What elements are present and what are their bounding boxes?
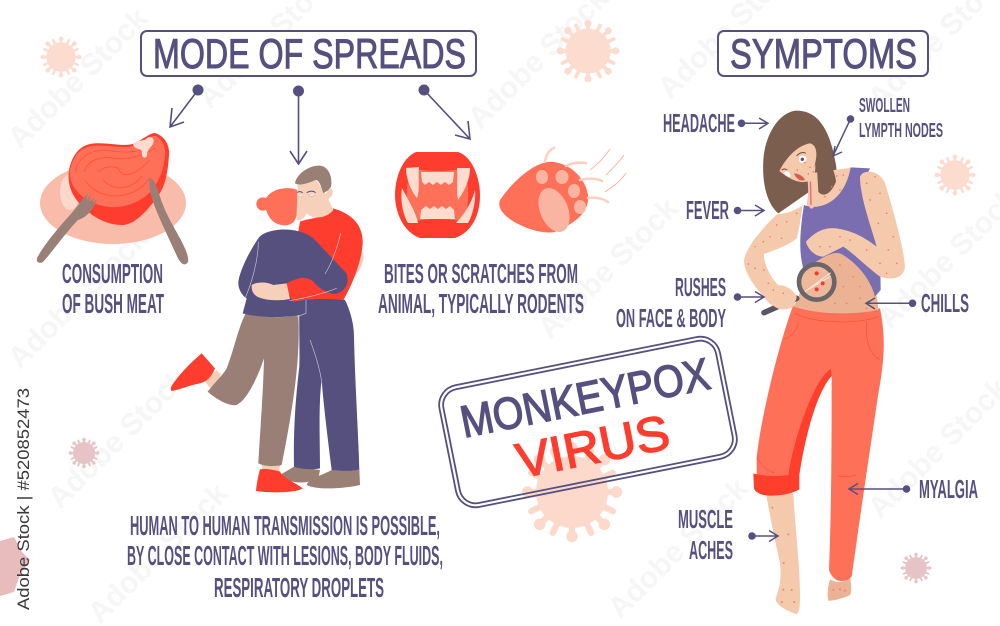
man's head: [297, 181, 333, 217]
icon: meat on plate: [37, 133, 188, 264]
trousers: [757, 305, 884, 581]
label: muscle aches: ACHES: [689, 535, 733, 565]
text: BITES OR SCRATCHES FROM: [384, 258, 578, 289]
thermometer: [808, 180, 814, 209]
leg and feet: [766, 493, 800, 614]
rash spots: [748, 163, 897, 308]
text: OF BUSH MEAT: [62, 288, 164, 319]
text: HUMAN TO HUMAN TRANSMISSION IS POSSIBLE,: [130, 510, 440, 541]
hair front: [817, 143, 836, 195]
label: muscle aches: MUSCLE: [678, 504, 733, 534]
hair back: [763, 111, 837, 213]
stamp: monkeypox virus: [436, 333, 740, 511]
faint watermark: Adobe Stock: [82, 477, 235, 626]
label: swollen lymph nodes: [833, 95, 943, 156]
label: muscle aches: [678, 504, 778, 565]
faint watermark: Adobe Stock: [532, 192, 685, 345]
heading: mode of spreads: MODE OF SPREADS: [153, 30, 466, 77]
face: [779, 143, 816, 182]
right arm and hand: [806, 172, 905, 279]
text: human to human transmission: RESPIRATORY DROPLETS: [214, 572, 384, 603]
woman's top: [238, 230, 348, 317]
label: headache: HEADACHE: [663, 108, 735, 138]
text: ANIMAL, TYPICALLY RODENTS: [378, 288, 584, 319]
text: CONSUMPTION: [62, 258, 163, 289]
label: swollen lymph nodes: SWOLLEN: [859, 95, 910, 117]
man's shoes: [280, 467, 320, 482]
arrow: to couple: [290, 86, 307, 164]
icon: animal paw with claws: [499, 148, 626, 237]
label: rushes on face and body: RUSHES: [675, 272, 726, 302]
torso: [793, 252, 878, 313]
faint watermark: Adobe Stock: [42, 362, 195, 515]
label: rushes on face and body: ON FACE & BODY: [616, 303, 726, 333]
faint watermark: Adobe Stock: [2, 2, 155, 155]
stamp: monkeypox virus: MONKEYPOX: [456, 348, 714, 448]
woman's trousers: [208, 312, 299, 466]
man's shirt: [290, 208, 363, 300]
faint watermark: Adobe Stock: [602, 472, 755, 625]
text: human to human transmission: [127, 510, 443, 603]
man's trousers: [294, 297, 359, 471]
label: fever: FEVER: [686, 195, 729, 225]
icon: animal mouth with fangs: [395, 152, 480, 238]
hand on magnifier: [765, 285, 797, 309]
magnifier: [764, 298, 797, 313]
woman's shoes and ankles: [262, 465, 280, 473]
man's forearm and woman's hand: [287, 278, 343, 302]
left arm: [744, 205, 803, 309]
man's hand: [345, 249, 364, 282]
text: consumption of bush meat: [62, 258, 164, 319]
neck and chest skin: [807, 167, 853, 210]
arrow: to meat: [170, 84, 204, 127]
faint watermark: Adobe Stock: [2, 222, 155, 375]
illustration: woman with symptoms, upper body: [744, 111, 905, 313]
stock id: Adobe Stock | #520852473: [14, 388, 33, 610]
arrow: to animals: [418, 84, 470, 139]
label: chills: [866, 288, 969, 318]
text: bites or scratches: [378, 258, 584, 319]
tank top: [800, 167, 881, 297]
heading: symptoms: SYMPTOMS: [730, 30, 917, 77]
woman's face and hair: [297, 192, 307, 220]
label: rushes on face and body: [616, 272, 764, 333]
rash on leg: [772, 508, 845, 602]
stamp: monkeypox virus: VIRUS: [512, 406, 674, 489]
illustration: woman with symptoms, lower body: [753, 305, 884, 614]
illustration: couple hugging: [171, 166, 364, 492]
text: BY CLOSE CONTACT WITH LESIONS, BODY FLUIDS,: [127, 540, 443, 571]
label: myalgia: [849, 474, 978, 504]
